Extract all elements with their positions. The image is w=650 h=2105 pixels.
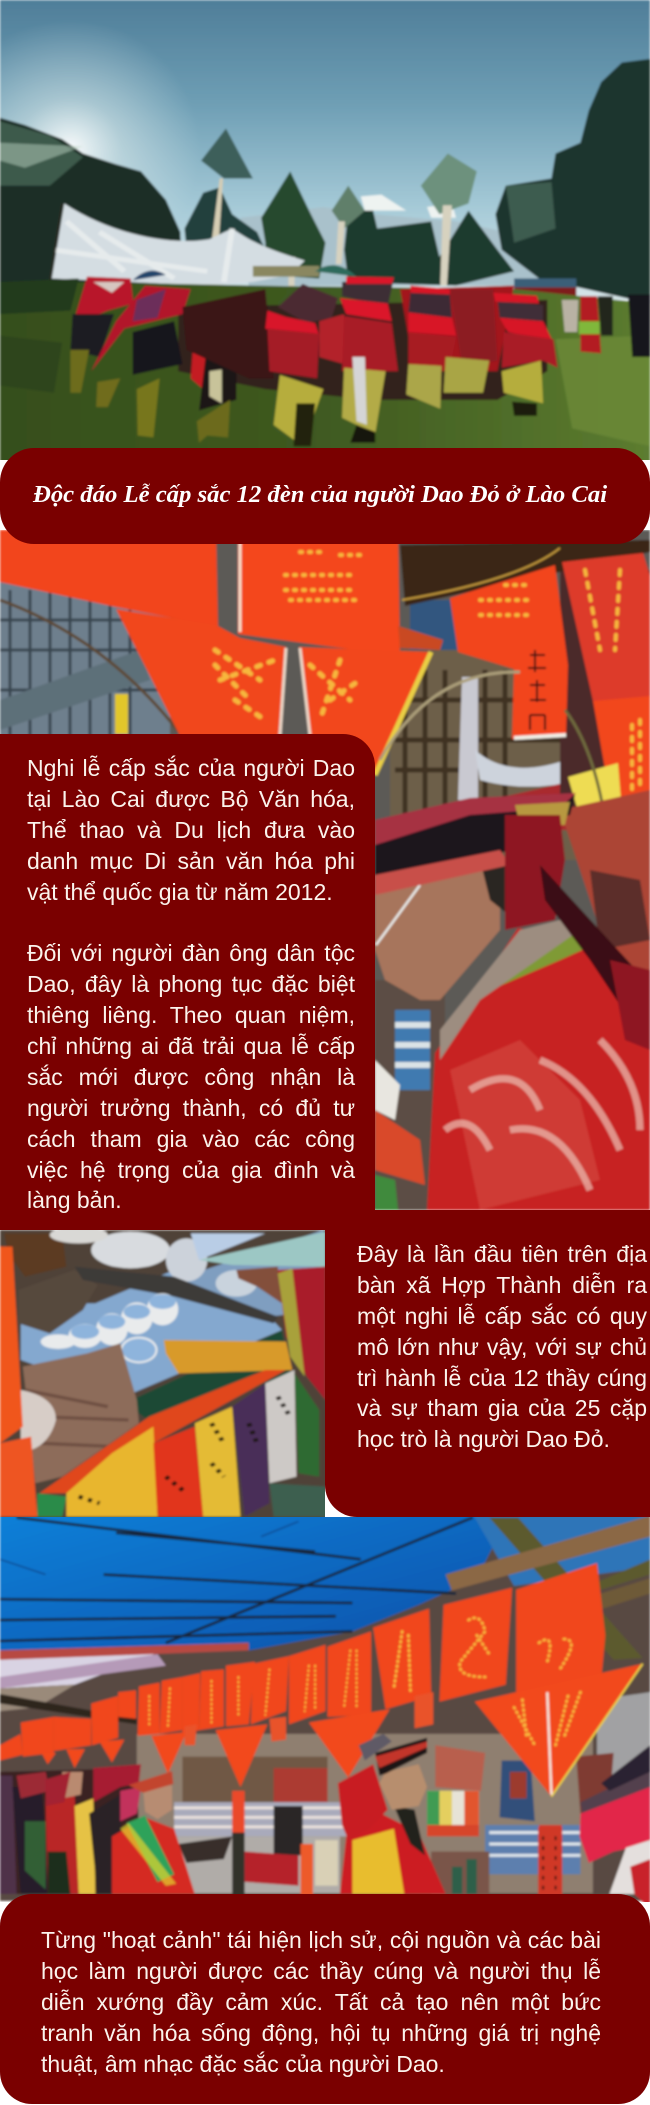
performer C	[189, 351, 208, 389]
photo: ceremony hall with flags and participants	[0, 1514, 650, 1908]
fringed costume at right	[580, 1768, 650, 1815]
robe	[278, 1267, 325, 1400]
performer A	[74, 275, 134, 316]
text: performances and culture: diễn xướng đầy cảm xúc. Tất cả tạo nên một bức	[41, 1989, 601, 2015]
middle trees	[183, 187, 264, 246]
photo: ritual table with cups and banners	[0, 1227, 336, 1520]
text: first time in the commune: và sự tham gia của 25 cặp	[357, 1395, 647, 1421]
text: ceremony introduction: sắc mới được công nhận là	[27, 1064, 355, 1090]
panel: first time in the commune	[325, 1210, 650, 1517]
elder in red and green robe	[112, 1817, 195, 1894]
brown paper stack	[23, 1343, 139, 1483]
bamboo beams	[489, 1518, 643, 1660]
building at left	[0, 580, 170, 750]
bystanders	[580, 296, 601, 353]
text: ceremony introduction	[27, 755, 356, 1213]
flags: triangles	[41, 1664, 643, 1797]
text: performances and culture: thuật, âm nhạc đặc sắc của người Dao.	[41, 2051, 445, 2077]
flags	[0, 530, 218, 627]
performer F	[408, 291, 452, 318]
text: ceremony introduction: việc hệ trọng của gia đình và	[27, 1157, 355, 1183]
text: ceremony introduction: người trưởng thành, có đủ tư	[27, 1095, 355, 1121]
photo: ceremony on the hillside	[0, 0, 650, 482]
crowd in background	[0, 1768, 141, 1894]
bunting cut outs	[79, 1397, 290, 1503]
text: ceremony introduction: vật thể quốc gia từ năm 2012.	[27, 879, 333, 905]
blue table cloth	[21, 1270, 282, 1397]
ground	[0, 282, 650, 460]
blue tarpaulin	[0, 1514, 510, 1654]
title bar	[0, 448, 650, 544]
calligraphy on the flag	[528, 650, 546, 730]
text: performances and culture: Từng "hoạt cảnh" tái hiện lịch sử, cội nguồn và các bài	[41, 1927, 601, 1953]
photo: paper flags and priest	[0, 530, 650, 1210]
back wall: paintings and stripes	[137, 1734, 593, 1893]
priest: headdress	[375, 795, 575, 885]
performer G	[450, 289, 498, 368]
beam	[400, 540, 650, 606]
text: ceremony introduction: Đối với người đàn ông dân tộc	[27, 940, 355, 966]
distant mountain	[240, 207, 568, 286]
text: first time in the commune: một nghi lễ cấp sắc có quy	[357, 1303, 647, 1329]
orange banner	[0, 1247, 23, 1443]
text: first time in the commune: trì hành lễ của 12 thầy cúng	[357, 1365, 647, 1391]
text: ceremony introduction: Thể thao và Du lịch đưa vào	[27, 817, 355, 843]
text: ceremony introduction: danh mục Di sản văn hóa phi	[27, 848, 355, 874]
performer D	[278, 284, 338, 323]
text: first time in the commune: Đây là lần đầu tiên trên địa	[357, 1241, 647, 1267]
text: first time in the commune: bàn xã Hợp Thành diễn ra	[357, 1272, 647, 1298]
lower background behind priest	[375, 980, 445, 1210]
group of performers	[70, 277, 558, 446]
bowl	[21, 1390, 56, 1450]
flags: upper row	[0, 1563, 605, 1760]
text: ceremony introduction: chỉ những ai đã trải qua lễ cấp	[27, 1033, 355, 1059]
performer B	[91, 286, 191, 371]
flag dots	[149, 1618, 580, 1745]
text: ceremony introduction: tại Lào Cai được Bộ Văn hóa,	[27, 786, 355, 812]
title: Độc đáo Lễ cấp sắc 12 đèn của người Dao Đỏ ở Lào Cai	[33, 481, 607, 508]
white bundles	[91, 1232, 170, 1268]
white cloth tent	[52, 203, 305, 286]
yellow strips	[164, 1340, 292, 1373]
right trees	[495, 59, 650, 303]
priest: face	[375, 860, 500, 1000]
hand	[236, 1267, 282, 1303]
text: first time in the commune: mô lớn như vậy, với sự chủ	[357, 1334, 647, 1360]
dark basket	[19, 1302, 88, 1334]
flag dots	[215, 552, 640, 800]
left forest	[0, 118, 182, 286]
text: ceremony introduction: Nghi lễ cấp sắc của người Dao	[27, 755, 355, 781]
panel: heritage and meaning	[0, 734, 375, 1230]
text: ceremony introduction: cách tham gia vào các công	[27, 1126, 355, 1152]
text: ceremony introduction: Dao, đây là phong tục đặc biệt	[27, 971, 355, 997]
young man in yellow robe	[340, 1814, 446, 1894]
stage	[253, 266, 319, 277]
text: ceremony introduction: làng bản.	[27, 1187, 122, 1213]
cups	[41, 1293, 178, 1363]
text: performances and culture: tranh văn hóa sống động, hội tụ những giá trị nghệ	[41, 2020, 601, 2046]
performer E	[340, 280, 394, 304]
performer H	[498, 300, 543, 321]
back row	[182, 289, 274, 378]
priest: robe	[427, 928, 650, 1210]
priest: collar and neck	[440, 920, 580, 1060]
text: performances and culture	[41, 1927, 601, 2077]
text: performances and culture: học làm người được các thầy cúng và người thụ lễ	[41, 1958, 601, 1984]
lower tarp stripes	[0, 1647, 174, 1688]
arc	[380, 672, 520, 760]
central scaffolding background	[390, 650, 576, 860]
text: first time in the commune	[357, 1241, 648, 1452]
folder	[199, 1232, 325, 1267]
bunting	[39, 1370, 286, 1493]
panel: closing text	[0, 1894, 650, 2104]
poles	[210, 177, 224, 239]
text: ceremony introduction: thiêng liêng. Theo quan niệm,	[27, 1002, 355, 1028]
text: first time in the commune: học trò là người Dao Đỏ.	[357, 1426, 610, 1452]
